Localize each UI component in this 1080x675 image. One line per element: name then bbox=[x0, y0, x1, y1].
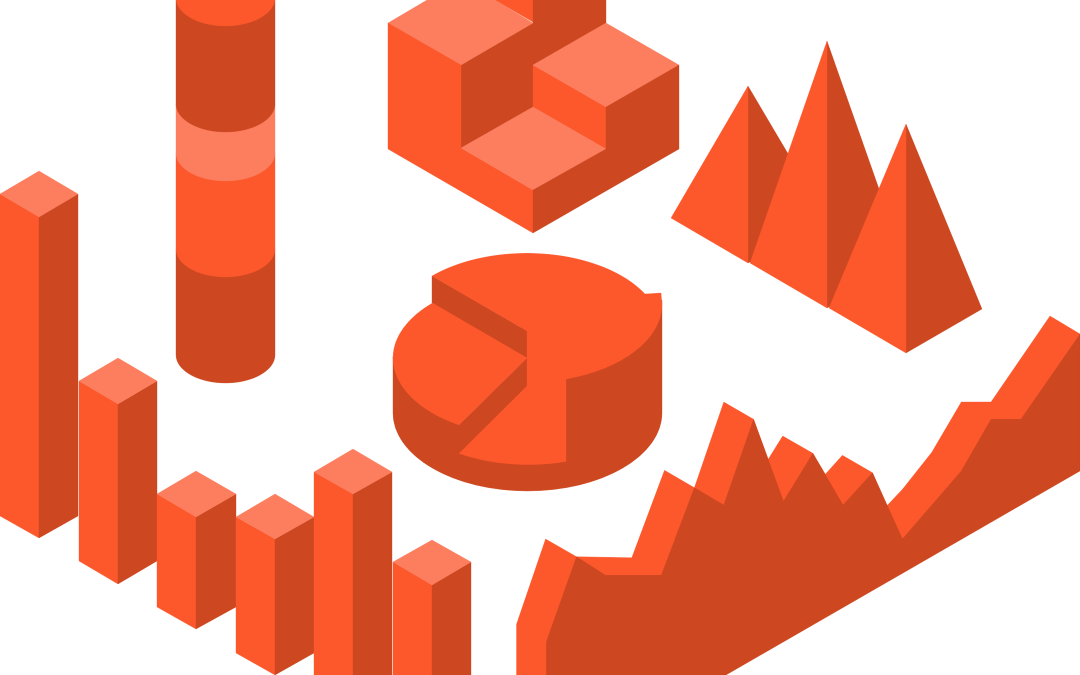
bar 4 bbox=[236, 494, 314, 675]
bar 1 bbox=[0, 171, 78, 538]
stacked cylinder bbox=[176, 0, 275, 383]
bar 6 bbox=[393, 540, 471, 675]
isometric cube steps bbox=[388, 0, 679, 233]
isometric bars bbox=[0, 171, 471, 675]
bar 5 bbox=[314, 449, 392, 675]
pyramids bbox=[671, 41, 982, 353]
isometric area chart bbox=[516, 316, 1080, 675]
3D pie chart bbox=[393, 253, 662, 491]
bar 2 bbox=[79, 358, 157, 584]
bar 3 bbox=[157, 471, 236, 629]
